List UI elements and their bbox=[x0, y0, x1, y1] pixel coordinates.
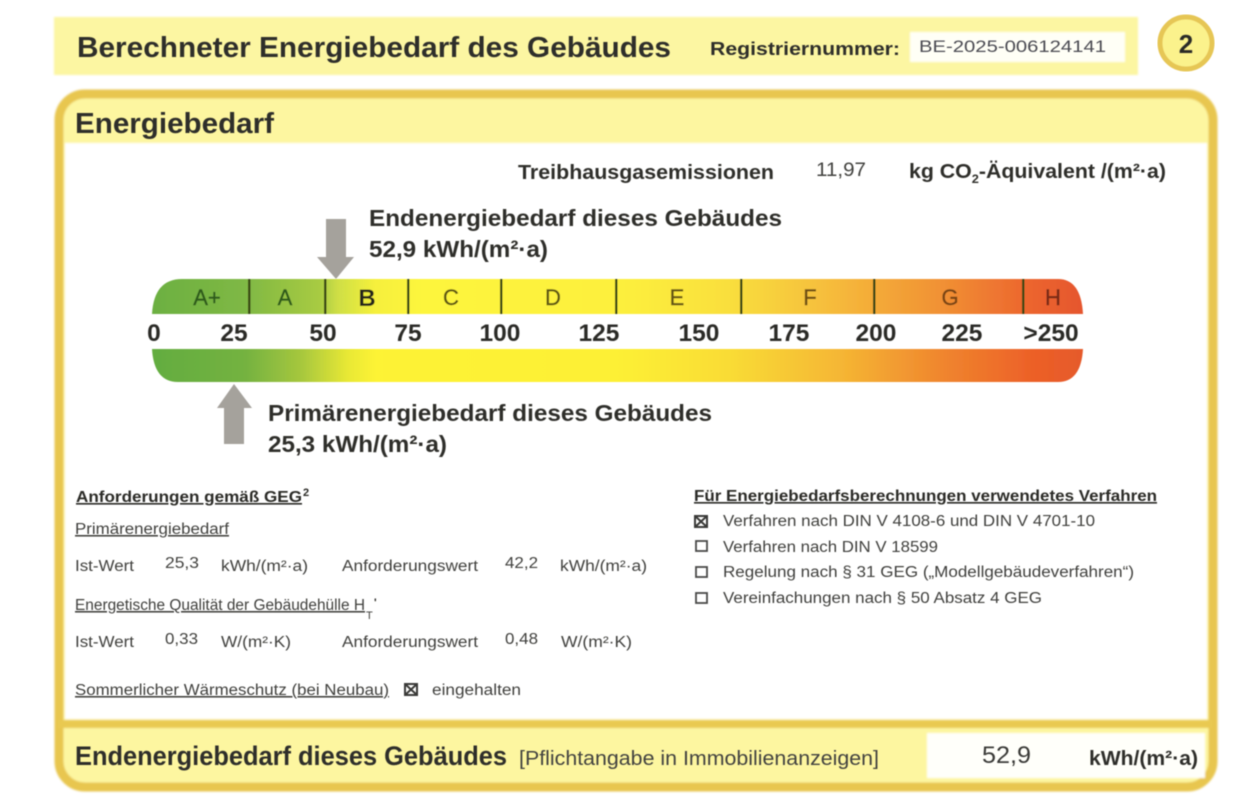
section heading: Energiebedarf bbox=[75, 108, 274, 140]
primary energy values: kWh/(m²·a) bbox=[221, 558, 308, 575]
scale numbers: 125 bbox=[579, 320, 619, 347]
final energy label: 52,9 kWh/(m²·a) bbox=[369, 236, 548, 262]
energy class scale: A bbox=[278, 285, 293, 310]
energy class scale: G bbox=[941, 285, 959, 310]
checked box: summer heat protection bbox=[405, 684, 417, 695]
envelope footnote mark: ' bbox=[374, 597, 377, 609]
compliance label: eingehalten bbox=[432, 682, 521, 699]
arrow: final energy down bbox=[317, 219, 354, 279]
energy class scale: C bbox=[443, 285, 459, 310]
footer label: Endenergiebedarf dieses Gebäudes bbox=[75, 741, 507, 771]
scale numbers bbox=[147, 320, 1079, 347]
greenhouse gas emissions: Treibhausgasemissionen bbox=[518, 161, 774, 184]
envelope values: 0,33 bbox=[165, 631, 198, 648]
registration number: BE-2025-006124141 bbox=[919, 37, 1106, 56]
final energy label bbox=[369, 205, 782, 262]
scale numbers: 150 bbox=[679, 320, 719, 347]
page number badge: 2 bbox=[1179, 29, 1193, 59]
primary energy values: Anforderungswert bbox=[342, 558, 479, 575]
energy class scale: A+ bbox=[193, 285, 221, 310]
primary energy values: 42,2 bbox=[505, 555, 538, 572]
registration label: Registriernummer: bbox=[710, 38, 900, 59]
primary energy subheading: Primärenergiebedarf bbox=[75, 521, 230, 538]
greenhouse gas emissions: 2 bbox=[972, 172, 979, 186]
footnote mark: 2 bbox=[303, 487, 309, 499]
method 4: Vereinfachungen nach § 50 Absatz 4 GEG bbox=[723, 590, 1042, 607]
calculation methods block bbox=[694, 488, 1157, 607]
scale numbers: >250 bbox=[1023, 320, 1079, 347]
envelope values: W/(m²·K) bbox=[561, 634, 632, 651]
envelope symbol suffix: T bbox=[366, 610, 373, 622]
method 2: Verfahren nach DIN V 18599 bbox=[723, 539, 938, 556]
energy class scale: F bbox=[803, 285, 817, 310]
energy class scale: E bbox=[670, 285, 684, 310]
energy class scale: H bbox=[1045, 285, 1061, 310]
methods heading: Für Energiebedarfsberechnungen verwendetes Verfahren bbox=[694, 488, 1157, 505]
primary energy values: Ist-Wert bbox=[75, 558, 135, 575]
scale numbers: 25 bbox=[220, 320, 248, 347]
envelope values: Anforderungswert bbox=[342, 634, 479, 651]
title: Berechneter Energiebedarf des Gebäudes bbox=[77, 32, 671, 64]
empty box: model building bbox=[696, 567, 707, 577]
arrow: primary energy up bbox=[217, 384, 252, 444]
final energy label: Endenergiebedarf dieses Gebäudes bbox=[369, 205, 782, 231]
scale numbers: 50 bbox=[309, 320, 337, 347]
empty box: simplifications bbox=[696, 593, 707, 603]
primary energy values: kWh/(m²·a) bbox=[560, 558, 647, 575]
method 3: Regelung nach § 31 GEG („Modellgebäudeverfahren“) bbox=[723, 564, 1134, 581]
page number badge bbox=[1160, 17, 1212, 69]
footer note: [Pflichtangabe in Immobilienanzeigen] bbox=[519, 747, 879, 770]
greenhouse gas emissions: kg CO bbox=[909, 161, 968, 183]
scale numbers: 200 bbox=[856, 320, 896, 347]
envelope values: Ist-Wert bbox=[75, 634, 135, 651]
scale numbers: 225 bbox=[942, 320, 982, 347]
checked box: DIN V 4108-6 bbox=[695, 516, 707, 527]
primary energy label: Primärenergiebedarf dieses Gebäudes bbox=[268, 400, 712, 426]
primary energy label: 25,3 kWh/(m²·a) bbox=[268, 431, 447, 457]
primary energy values bbox=[75, 555, 647, 575]
requirements heading: Anforderungen gemäß GEG bbox=[76, 489, 302, 506]
scale numbers: 0 bbox=[147, 320, 161, 347]
greenhouse gas emissions: 11,97 bbox=[816, 160, 866, 181]
footer value: 52,9 bbox=[982, 742, 1031, 769]
greenhouse gas emissions bbox=[518, 160, 1166, 186]
scale numbers: 175 bbox=[769, 320, 809, 347]
primary energy values: 25,3 bbox=[165, 555, 199, 572]
scale numbers: 75 bbox=[394, 320, 422, 347]
primary energy label bbox=[268, 400, 712, 457]
envelope values: 0,48 bbox=[505, 631, 538, 648]
primary energy gradient bar bbox=[152, 349, 1083, 382]
energy class scale: D bbox=[545, 285, 561, 310]
energy class scale: B bbox=[358, 285, 376, 312]
header band bbox=[54, 17, 1138, 75]
envelope values bbox=[75, 631, 632, 651]
footer unit: kWh/(m²·a) bbox=[1089, 747, 1198, 770]
envelope values: W/(m²·K) bbox=[221, 634, 291, 651]
energy class scale bbox=[152, 279, 1083, 314]
scale numbers: 100 bbox=[480, 320, 520, 347]
empty box: DIN V 18599 bbox=[696, 541, 707, 551]
building envelope subheading: Energetische Qualität der Gebäudehülle H bbox=[75, 597, 365, 614]
greenhouse gas emissions: -Äquivalent /(m²·a) bbox=[979, 160, 1166, 183]
requirements block bbox=[75, 487, 647, 699]
summer heat protection: Sommerlicher Wärmeschutz (bei Neubau) bbox=[75, 682, 389, 699]
method 1: Verfahren nach DIN V 4108-6 und DIN V 4701-10 bbox=[723, 513, 1095, 530]
